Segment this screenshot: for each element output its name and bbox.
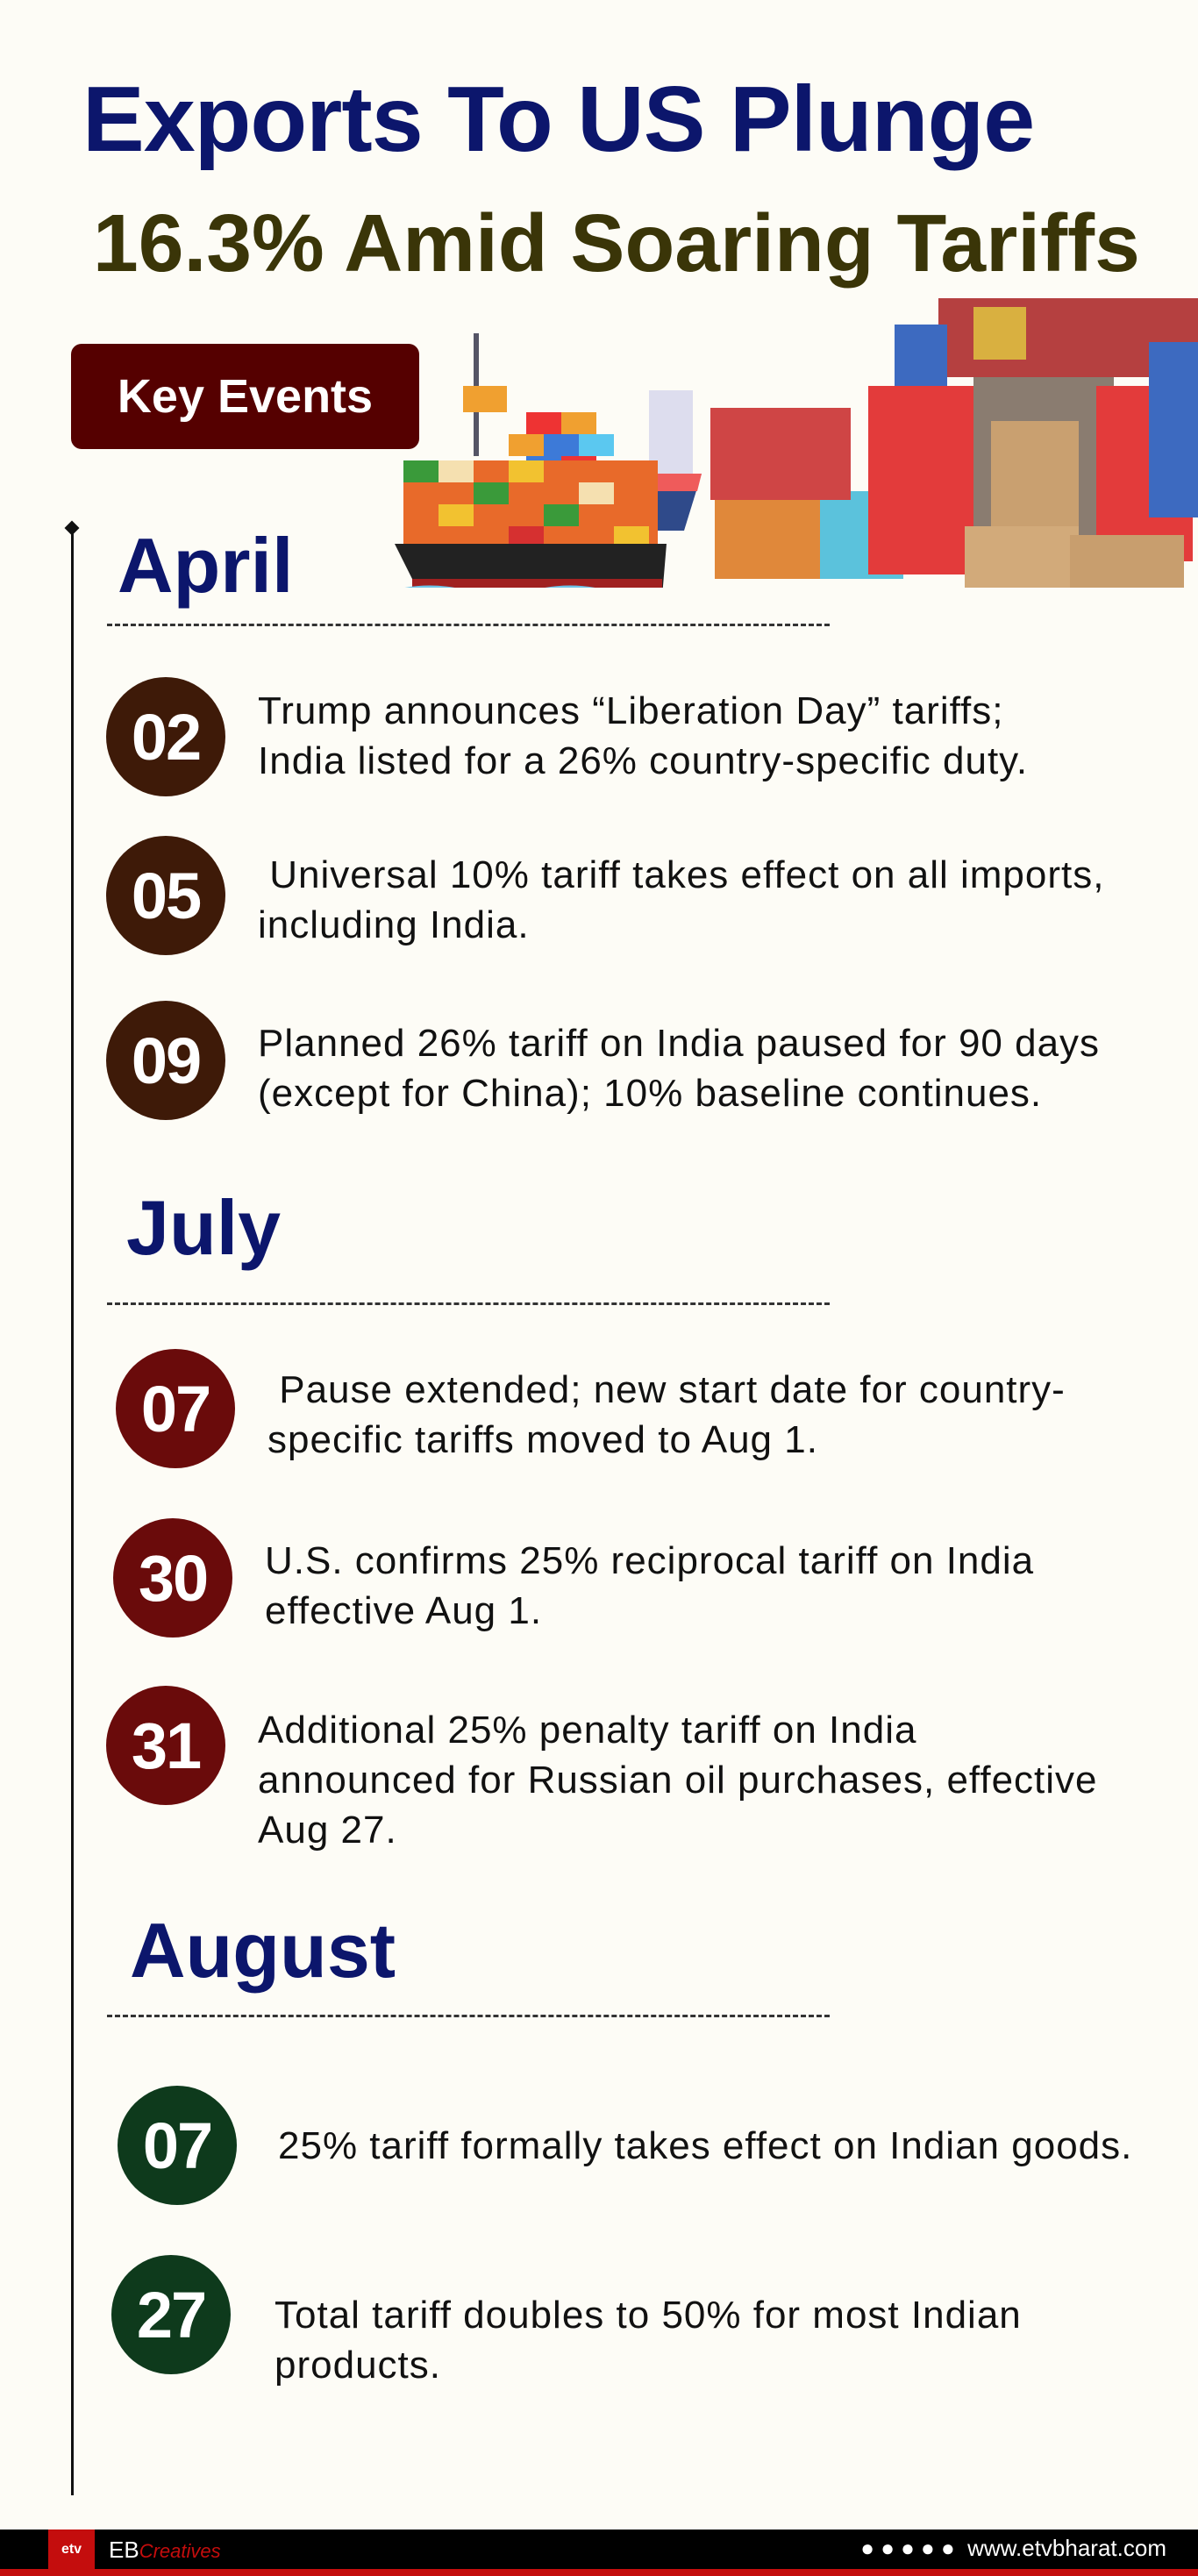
- date circle 27: 27: [137, 2279, 205, 2351]
- month: April: April: [118, 522, 293, 609]
- date circle 02: [106, 677, 225, 796]
- big red container and boxes: [868, 298, 1198, 588]
- month: July: July: [126, 1184, 281, 1271]
- date circle 07: [116, 1349, 235, 1468]
- illustration: ships and containers: [395, 298, 1198, 588]
- event text 02: India listed for a 26% country-specific duty.: [258, 739, 1028, 782]
- event text 30: effective Aug 1.: [265, 1589, 542, 1632]
- title line 2: 16.3% Amid Soaring Tariffs: [93, 197, 1140, 289]
- event text 27: products.: [275, 2344, 441, 2387]
- event text 02: Trump announces “Liberation Day” tariffs;: [258, 689, 1003, 732]
- date circle 27: [111, 2255, 231, 2374]
- event July 30: [113, 1518, 1034, 1638]
- date circle 07: [118, 2086, 237, 2205]
- timeline line: [71, 529, 74, 2495]
- event August 27: [111, 2255, 1022, 2387]
- date circle 05: [106, 836, 225, 955]
- footer: [0, 2530, 1198, 2576]
- event text 09: [258, 1022, 1100, 1115]
- date circle 30: 30: [139, 1542, 207, 1614]
- date circle 07: 07: [143, 2109, 211, 2182]
- event April 02: [106, 677, 1028, 796]
- footer logo: etv: [61, 2542, 82, 2557]
- event text 07: Pause extended; new start date for country-: [279, 1368, 1066, 1411]
- date circle 05: 05: [132, 860, 200, 931]
- date circle 31: 31: [132, 1709, 200, 1782]
- month: August: August: [130, 1907, 396, 1994]
- event text 27: [275, 2294, 1022, 2387]
- front container ship: [395, 460, 675, 596]
- event text 07: 25% tariff formally takes effect on Indian goods.: [278, 2124, 1132, 2167]
- footer social icons and url: ● ● ● ● ● www.etvbharat.com: [860, 2535, 1166, 2561]
- event text 05: [258, 853, 1104, 946]
- event August 07: [118, 2086, 1132, 2205]
- date circle 02: 02: [132, 700, 200, 774]
- key events badge: Key Events: [118, 370, 373, 423]
- title line 1: Exports To US Plunge: [82, 68, 1034, 171]
- event April 05: [106, 836, 1104, 955]
- event text 31: [258, 1709, 1098, 1852]
- date circle 07: 07: [141, 1372, 210, 1445]
- event text 30: U.S. confirms 25% reciprocal tariff on India: [265, 1539, 1034, 1582]
- date circle 30: [113, 1518, 232, 1638]
- back ship: [439, 333, 702, 566]
- event July 07: [116, 1349, 1066, 1468]
- event text 31: announced for Russian oil purchases, effective: [258, 1759, 1098, 1802]
- event text 31: Additional 25% penalty tariff on India: [258, 1709, 916, 1752]
- date circle 31: [106, 1686, 225, 1805]
- event text 09: (except for China); 10% baseline continues.: [258, 1072, 1042, 1115]
- event text 07: specific tariffs moved to Aug 1.: [267, 1418, 818, 1461]
- timeline diamond marker: [65, 521, 79, 535]
- event text 05: Universal 10% tariff takes effect on all imports,: [269, 853, 1104, 896]
- event text 02: [258, 689, 1028, 782]
- event text 30: [265, 1539, 1034, 1632]
- footer logo: [48, 2530, 95, 2569]
- event text 31: Aug 27.: [258, 1809, 397, 1852]
- date circle 09: [106, 1001, 225, 1120]
- event text 09: Planned 26% tariff on India paused for 90 days: [258, 1022, 1100, 1065]
- event text 27: Total tariff doubles to 50% for most Indian: [275, 2294, 1022, 2337]
- event text 05: including India.: [258, 903, 530, 946]
- key events badge: [71, 344, 419, 449]
- event July 31: [106, 1686, 1098, 1852]
- stacked containers: [710, 408, 903, 579]
- footer brand: EBCreatives: [109, 2537, 221, 2563]
- event text 07: [267, 1368, 1066, 1461]
- event April 09: [106, 1001, 1100, 1120]
- date circle 09: 09: [132, 1024, 200, 1096]
